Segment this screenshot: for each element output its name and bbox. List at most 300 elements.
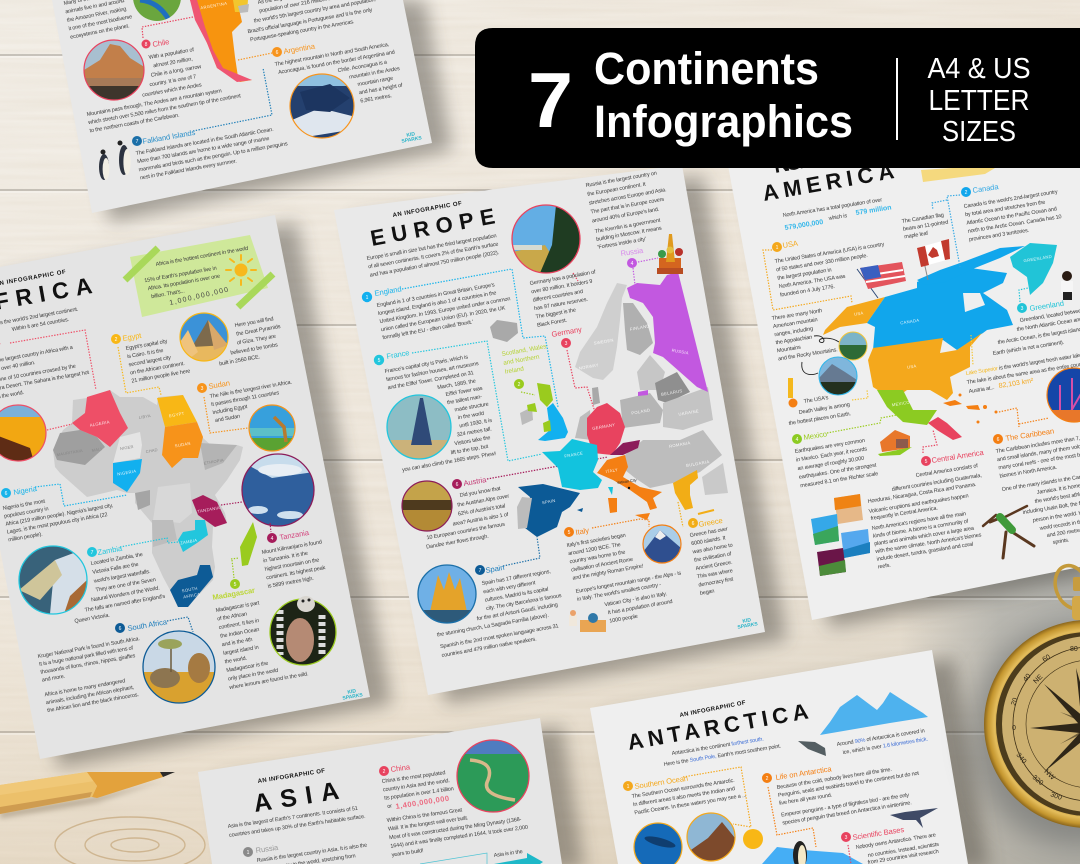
photo: Sahara desert [0, 403, 48, 463]
map: Europe: BULGARIA [686, 459, 710, 468]
callout: Southern Ocean [623, 767, 751, 827]
map: Europe: FINLAND [629, 323, 650, 332]
callout: France: the tallest man- [447, 394, 483, 406]
callout: Chile: Chile [152, 37, 170, 49]
callout: Italy: and the mighty Roman Empire! [572, 563, 644, 582]
logo: Kid Sparks [400, 130, 423, 145]
callout: Madagascar: 5 [234, 582, 237, 588]
sizes: LETTER [928, 85, 1030, 117]
callout: Life on Antarctica: species of penguin that breed on Antarctica in wintertime. [782, 800, 913, 827]
callout: China: China is the most populated [381, 770, 446, 785]
intro text: of all seven continents. It covers 2% of the Earth's surface [368, 241, 499, 270]
title: Asia: ASIA [252, 777, 341, 818]
callout: Zambia: They are one of the Seven [95, 577, 156, 594]
photo: walrus [687, 813, 735, 862]
map: South America [190, 0, 252, 82]
callout: Argentina [238, 41, 405, 118]
callout: Canada: by total area and stretches from the [965, 200, 1046, 218]
map: Europe: UKRAINE [678, 408, 699, 417]
map: North America: CANADA [900, 318, 920, 325]
title: Europe: EUROPE [368, 203, 497, 251]
callout: Italy: Europe's longest mountain range - the Alps - is [575, 570, 682, 595]
map: Europe: NORWAY [578, 362, 599, 371]
scale labels: 60 [1042, 654, 1052, 664]
callout: Tanzania: in Tanzania. It is the [263, 551, 308, 564]
callout: Madagascar: of the African [217, 611, 247, 623]
scale labels: 0 [1012, 725, 1016, 732]
callout: Austria: 10 European countries the famous [426, 522, 506, 541]
callout: South Africa: thousands of lions, rhinos, hippos, giraffes [40, 653, 136, 676]
callout: Madagascar: largest island in [223, 645, 259, 657]
callout: France [374, 341, 542, 473]
text: Amazon: it one of the most biodiverse [68, 14, 133, 32]
callout: USA: The United States of America (USA) is a country [774, 242, 885, 265]
callout: Mexico: earthquakes. One of the strongest [798, 462, 877, 481]
map boxes and arrow [420, 849, 543, 864]
callout: Mexico: 4 [796, 437, 799, 443]
callout: Scientific Bases [841, 825, 940, 864]
callout: Italy: civilisation of Ancient Rome [571, 557, 634, 574]
callout: France: Eiffel Tower was [445, 386, 483, 398]
green note [125, 235, 273, 317]
callout: France: and the Eiffel Tower. Completed on 31 [387, 370, 474, 391]
map: Africa: MAURITANIA [56, 448, 83, 457]
callout: Falkland Islands: nest in the Falkland Islands every summer. [140, 158, 238, 181]
callout: Madagascar: where lemurs are found in the wild. [228, 671, 309, 691]
callout: Life on Antarctica [762, 763, 924, 847]
logo: Kid Sparks [341, 687, 364, 702]
callout: Central America: Honduras, Nicaragua, Costa Rica and Panama. [867, 482, 977, 505]
callout: Chile [85, 17, 243, 134]
callout: Greenland: 3 [1021, 306, 1024, 312]
callout: Madagascar: Madagascar is the [226, 661, 269, 674]
map: Europe: POLAND [631, 407, 651, 416]
photo: the Alps [642, 524, 682, 564]
photo: pyramids [178, 312, 230, 363]
photo: Aconcagua [288, 72, 356, 140]
callout: France: lift to the top, but [450, 444, 489, 456]
callout: Egypt: 21 million people live here [131, 368, 191, 385]
callout: Central America: frequently in Central America. [870, 505, 939, 522]
callout: Argentina: Argentina [283, 41, 316, 56]
map: Africa [53, 390, 257, 607]
callout: Argentina: and has a height of [359, 83, 403, 96]
map: Europe: Vatican City [617, 478, 637, 485]
map: Europe: BELARUS [661, 388, 683, 397]
callout: Sudan: The Nile is the longest river in Africa. [209, 379, 293, 400]
callout: Russia: The Kremlin is a government [594, 218, 661, 235]
callout: Nigeria [1, 484, 127, 543]
callout: Germany: different countries and [532, 289, 583, 304]
logo: Kid Sparks: KID [347, 688, 357, 696]
callout: Greece: Greece has over [689, 526, 728, 539]
heading: Continents [594, 43, 819, 94]
map: Africa: ZAMBIA [180, 538, 198, 545]
intro text: Asia is the largest of Earth's 7 continents. It consists of 51 [227, 806, 358, 830]
icon: whale [890, 808, 938, 828]
sheet: Africa [0, 215, 370, 759]
callout: Sudan [197, 378, 297, 433]
intro text: countries and takes up 30% of the Earth's habitable surface. [229, 814, 366, 839]
icon: Vatican building [569, 610, 606, 632]
callout: Southern Ocean: Pacific Oceans. In these waters you may see a ... [634, 793, 747, 816]
photo: forest landscape [512, 205, 582, 275]
callout: Germany: over 80 million. It borders 9 [531, 279, 593, 295]
text: ice cover: ice, which is over 1.6 kilometres thick. [842, 736, 929, 756]
callout: Greenland [992, 288, 1080, 357]
callout: Argentina: 6 [276, 50, 279, 56]
callout: France: in the world [457, 411, 485, 421]
callout: Russia: 4 [631, 261, 634, 267]
callout: Chile: 8 [145, 42, 148, 48]
callout: Italy: Italy's first societies began [566, 533, 626, 549]
callout: Central America: North America's regions have all the main [871, 511, 966, 532]
text: Great Pyramids: the Great Pyramids [236, 324, 281, 338]
callout: Southern Ocean: The Southern Ocean surrounds the Antarctic. [631, 778, 736, 800]
callout: Austria: Did you know that [459, 486, 502, 499]
callout: Madagascar: and is the 4th [221, 637, 253, 648]
callout: China: 1644) and it was finally completed in 1644. It took over 2,000 [390, 825, 528, 850]
callout: Russia [585, 169, 675, 285]
crown [1072, 577, 1080, 620]
callout: France: until 1930. It is [459, 418, 493, 429]
callout: England: England [374, 284, 402, 298]
text: Lake Superior: 82,103 km² [998, 377, 1035, 390]
callout: South Africa: Africa is home to many endangered [44, 678, 126, 698]
icons: biome squares [811, 494, 870, 576]
text: Death Valley [788, 390, 868, 427]
callout: Canada: Canada is the world's 2nd-largest country [963, 189, 1058, 210]
callout: Chile: Chile is a long, narrow [150, 64, 202, 79]
callout: Germany: Germany [551, 325, 583, 339]
callout: Russia: the European continent. It [587, 182, 647, 198]
map: Africa: LIBYA [138, 413, 151, 420]
intro text: Antarctica is the continent furthest south. [671, 736, 765, 757]
scale labels [1010, 646, 1078, 802]
map: Europe: RUSSIA [671, 348, 689, 355]
callout: Argentina: Chile. Aconcagua is a [337, 59, 388, 74]
icon: house [878, 430, 912, 456]
callout: Central America: reefs. [877, 562, 892, 570]
callout: Chile: Mountains pass through. The Andes are a mountain system [86, 88, 223, 118]
callout: Germany [529, 269, 604, 412]
title: Europe: AN INFOGRAPHIC OF [392, 201, 463, 219]
callout: Scientific Bases: Scientific Bases [852, 825, 905, 842]
photo: Rocky Mountains [819, 357, 857, 396]
text: Death Valley: Death Valley is among [798, 402, 850, 416]
callout: Tanzania: continent. Its highest peak [266, 565, 326, 581]
green note: Africa is the hottest continent in the world [155, 246, 249, 268]
callout: Greece: Ancient Greece. [695, 560, 733, 572]
text: Amazon [63, 0, 134, 41]
callout: Egypt: Egypt's capital city [125, 339, 168, 352]
callout: Italy: 1000 people [609, 614, 638, 625]
callout: South Africa: It is a huge national park filled with tens of [39, 645, 134, 668]
callout: Falkland Islands: 7 [136, 139, 139, 145]
callout: China [379, 762, 530, 858]
callout: China: or [387, 803, 393, 810]
callout: Russia: Russia is the largest country on [585, 171, 657, 189]
text: mountains: There are many North [771, 308, 823, 322]
callout: Germany: has 97 nature reserves. [534, 297, 589, 312]
text: mountains: Mountains [777, 345, 802, 354]
callout: France: France's capital city is Paris, which is [384, 354, 469, 375]
map: North America: USA [854, 310, 864, 317]
callout: Canada: provinces and 3 territories. [969, 228, 1030, 243]
text: ice cover: Around 90% of Antarctica is covered in [836, 728, 925, 748]
callout: Scotland, Wales and Northern Ireland: and Northern [503, 353, 541, 367]
callout: Central America: Volcanic eruptions and earthquakes happen [868, 493, 969, 515]
callout: Argentina: The highest mountain in North and South America, [274, 42, 390, 68]
scale labels: 80 [1070, 646, 1078, 653]
callout: Argentina: mountain in the Andes [349, 66, 401, 81]
text: Lake Superior: Austria at... [968, 385, 995, 395]
callout: France: France [386, 348, 410, 361]
callout: Austria: 62% of Austria's total [458, 503, 506, 518]
callout: Central America: include desert, tundra, grassland and coral [876, 542, 974, 563]
callout: Italy: 5 [568, 530, 571, 536]
callout: England: union called the European Union (EU). In 2020, the UK [381, 305, 506, 333]
callout: Italy: Vatican City - is also in Italy. [604, 591, 668, 608]
map: North America [823, 243, 1057, 440]
callout: Russia: Russia [620, 246, 645, 258]
callout: Canada [932, 182, 1064, 267]
callout: Southern Ocean: Southern Ocean [634, 774, 689, 791]
callout: Egypt: on the African continent. [130, 361, 186, 376]
callout: Russia: 'Fortress inside a city' [597, 236, 647, 251]
callout: Canada: north to the Arctic Ocean. Canada has 10 [967, 214, 1062, 235]
arrow: mountains [802, 336, 839, 375]
map: Europe: FRANCE [564, 450, 584, 459]
logo: Kid Sparks: SPARKS [401, 135, 423, 145]
callout: Life on Antarctica: Penguins, seals and seabirds travel to the continent but do not [778, 771, 920, 799]
logo: Kid Sparks: SPARKS [342, 692, 364, 702]
icon: St Basil's Cathedral [657, 234, 683, 274]
text: mountains [771, 307, 839, 362]
intro text: North America has a total population of over [782, 197, 883, 219]
callout: China: Most of it was constructed during the Ming Dynasty (1368- [389, 817, 522, 841]
callout: Greenland: Earth (which is not a continent). [992, 340, 1065, 357]
callout: Madagascar [212, 558, 309, 691]
note: yellow [921, 165, 1000, 182]
title: Antarctica: ANTARCTICA [626, 699, 810, 755]
intro text [782, 197, 892, 232]
image: sprinter [983, 506, 1034, 558]
callout: Zambia: Queen Victoria. [74, 612, 111, 625]
callout: Russia: 1 [247, 850, 250, 856]
callout: Falkland Islands: mammals and birds such as the penguin. Up to a million penguins [138, 141, 288, 173]
callout: Madagascar: only place in the world [227, 668, 279, 683]
banner [475, 28, 1080, 168]
callout: Tanzania: 4 [271, 536, 274, 542]
callout: Sudan: including Egypt [212, 404, 248, 416]
text: Canadian flag: The Canadian flag [901, 212, 944, 225]
callout: Spain: cultures. Madrid is its capital [484, 587, 549, 604]
callout: Central America [867, 430, 985, 571]
icon: child [1061, 271, 1073, 300]
callout: Falkland Islands: The Falkland Islands are located in the South Atlantic Ocean. [135, 127, 275, 157]
callout: Russia: The part that is in Europe covers [590, 197, 665, 216]
number 7: 7 [528, 56, 573, 144]
callout: South Africa: the African lion and the black rhinoceros. [47, 692, 140, 714]
callout: China: China [390, 762, 411, 774]
callout: China: Wall. It is the longest wall ever built. [388, 815, 469, 833]
callout: France: 324 metres tall. [456, 426, 493, 438]
case [984, 620, 1080, 828]
callout: China: 1,400,000,000 [395, 794, 450, 811]
icon: seal [798, 741, 826, 756]
map: Europe [490, 272, 728, 537]
callout: Canada: Canada [972, 182, 1000, 195]
icon: sun [743, 829, 763, 849]
callout: Chile: which stretch over 5,500 miles from the southern tip of the continent [87, 93, 242, 126]
callout: England: longest island. England is also 1 of 4 countries in the [378, 290, 497, 317]
callout: South Africa: animals, including the African elephant, [45, 685, 135, 706]
callout: Nigeria: Nigeria is the most [2, 499, 46, 512]
scale labels: 320 [1031, 774, 1044, 787]
photo: Great Wall [457, 740, 529, 812]
callout: Scientific Bases: 3 [845, 835, 848, 841]
intro text: 579 million [855, 204, 892, 217]
paper [0, 215, 370, 759]
text: Canadian flag: bears an 11-pointed [903, 220, 949, 233]
sheet: North America [727, 143, 1080, 620]
photo: Victoria Falls [19, 546, 87, 614]
text: Amazon: the Amazon River, making [67, 6, 127, 24]
scale labels: 40 [1022, 673, 1033, 683]
callout: Spain [429, 537, 569, 659]
text: Canadian flag [901, 212, 950, 240]
callout: USA: North America. The USA was [778, 274, 846, 290]
photo: Kilimanjaro [240, 452, 316, 528]
icon: US flag [857, 262, 906, 298]
green note: 1,000,000,000 [169, 287, 229, 307]
text: Death Valley: The USA's [803, 395, 829, 405]
callout: Chile: to the northern coasts of the Caribbean. [89, 113, 180, 134]
callout: Zambia: Natural Wonders of the World. [91, 585, 161, 603]
callout: Spain: Spain [485, 563, 505, 575]
callout: Greece: was also home to [691, 543, 733, 556]
callout: Spain: 7 [479, 568, 482, 574]
callout: Sudan: 3 [201, 386, 204, 392]
icon: thermometer [788, 378, 798, 408]
callout: Mexico: an average of roughly 30,000 [797, 456, 865, 472]
callout: South Africa: 6 [119, 626, 122, 632]
callout: Tanzania: Tanzania [279, 528, 310, 542]
callout: Greece: Greece [698, 516, 723, 529]
text: Brazil [243, 0, 380, 44]
callout: China: Within China is the famous Great [386, 807, 463, 824]
callout: Italy [564, 519, 688, 629]
callout: Austria: Danube river flows through. [426, 534, 490, 551]
callout: Austria [418, 457, 608, 551]
callout: Italy: country was home to the [569, 550, 626, 565]
title: Asia: AN INFOGRAPHIC OF [257, 768, 326, 785]
green note: billion. That's... [151, 288, 186, 300]
callout: Falkland Islands [132, 68, 290, 181]
callout: France: Visitors take the [454, 435, 491, 447]
callout: Zambia: 7 [91, 550, 94, 556]
callout: Zambia: Zambia [97, 544, 124, 557]
callout: Madagascar: Madagascar is part [215, 600, 260, 614]
callout: Scotland, Wales and Northern Ireland: Scotland, Wales [501, 343, 547, 358]
callout: Russia: stretches across Europe and Asia. [588, 187, 667, 207]
map: Africa: TANZANIA [197, 505, 220, 514]
callout: Austria: area? Austria is also 1 of [452, 512, 509, 528]
map: Europe: SPAIN [542, 498, 556, 505]
callout: USA: 1 [776, 245, 779, 251]
sheet: Antarctica [590, 650, 968, 864]
callout: Madagascar: the world. [224, 655, 248, 665]
callout: Caribbean: 6 [997, 437, 1000, 443]
map: Europe: SWEDEN [593, 337, 614, 346]
callout: Greece: This was where [697, 568, 733, 580]
scale labels: 20 [1010, 697, 1020, 707]
callout: Chile: country. It is one of 7 [149, 74, 197, 88]
photo: Amazon river [133, 0, 181, 21]
callout: Madagascar: continent. It lies in [218, 618, 260, 631]
callout: Greenland: Greenland [1029, 299, 1064, 313]
text: Great Pyramids: built in 2560 BCE. [219, 354, 261, 367]
paper [590, 650, 968, 864]
text: Great Pyramids [213, 315, 286, 367]
callout: Italy: Italy [575, 526, 590, 537]
callout: Chile: almost 20 million, [153, 56, 194, 69]
callout: Italy: It has a population of around [607, 599, 673, 616]
callout: South Africa: Kruger National Park is found in South Africa. [37, 636, 141, 660]
text: mountains: the Appalachian [775, 335, 813, 346]
callout: Nigeria: Lagos, is the most populous city in Africa (22 [6, 512, 108, 536]
callout: Algeria [0, 330, 96, 430]
green note: 15% of Earth's population live in [144, 266, 217, 284]
callout: Central America: different countries including Guatemala, [891, 473, 983, 493]
callout: France: March, 1889, the [437, 378, 476, 391]
text: mountains: ranges, including [774, 326, 814, 338]
callout: Mexico [792, 415, 897, 489]
logo: Kid Sparks [736, 616, 759, 631]
callout: Life on Antarctica: Life on Antarctica [775, 764, 833, 782]
callout: Nigeria: million people). [8, 531, 44, 543]
callout: Spain: the stunning church, La Sagrada Familia (above). [437, 613, 550, 639]
photo: giraffe [248, 404, 296, 452]
callout: Southern Ocean: In different areas it also meets the Indian and [633, 786, 735, 808]
photo: Appalachian Mountains [839, 332, 867, 360]
scale labels: NE [1032, 673, 1045, 685]
text: Brazil: Brazil's official language is Portuguese and it is the only [247, 7, 373, 35]
paper [727, 160, 1080, 620]
callout: Spain: for the art of Antoni Gaudí, including [476, 602, 558, 622]
sizes [928, 53, 1030, 148]
callout: Egypt: is Cairo. It is the [127, 348, 164, 360]
text: Amazon: ecosystems on the planet. [70, 23, 131, 41]
callout: Mexico: Mexico [803, 429, 827, 442]
callout: Mexico: measured 8.1 on the Richter scale [800, 471, 879, 489]
intro text: which is [827, 213, 848, 222]
callout: Russia: building in Moscow. It means [596, 226, 662, 243]
sizes: SIZES [942, 116, 1016, 148]
text: mountains: and the Rocky Mountains. [778, 347, 839, 362]
intro text: and has a population of almost 750 million people (2022). [369, 250, 500, 279]
callout: Mexico: in Mexico. Each year, it records [796, 446, 868, 464]
callout: Sudan: It passes through 11 countries [211, 390, 280, 408]
text: Death Valley: the hottest places on Earth. [788, 411, 852, 427]
callout: Nigeria: populous country in [4, 506, 49, 520]
text: Canadian flag: maple leaf [904, 231, 929, 240]
callout: Central America: plants and animals which cover a large area [874, 526, 975, 547]
callout: Chile: countries which the Andes [142, 82, 202, 99]
text: Great Pyramids: Here you will find [234, 316, 274, 329]
callout: Central America: with the same climate. North America's biomes [874, 532, 982, 555]
